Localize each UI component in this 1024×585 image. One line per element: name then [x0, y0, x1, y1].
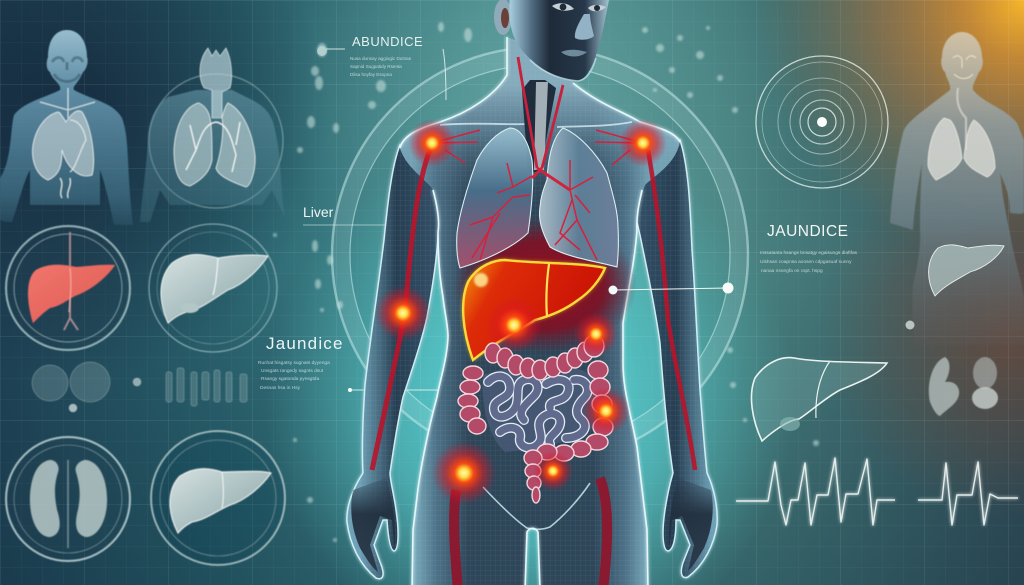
callout line: liver right [608, 282, 734, 294]
icon: liver outline [751, 358, 887, 441]
chart: ECG traces [736, 458, 1018, 525]
torso and legs [400, 37, 680, 585]
mesh and dark shading on arms and hands [347, 140, 717, 579]
panel: circle small liver [151, 431, 285, 565]
text block: Abundice: ABUNDICE [352, 34, 423, 49]
organ: liver [463, 260, 605, 360]
icon: kidneys right [929, 357, 998, 416]
text block: Jaundice left: Rsangy sgatonda pynsgtda [261, 376, 319, 382]
text block: Abundice [350, 34, 423, 77]
panel: circle red liver [6, 226, 130, 350]
panel: left figure lungs [140, 48, 285, 222]
organ: small intestine [482, 364, 598, 452]
text block: Jaundice left [258, 334, 462, 392]
text block: Jaundice right: Uishsan coapnsa aoosen cdpgasuaf sunny [760, 259, 852, 265]
panel: left figure chest anatomy [0, 30, 133, 225]
callout line: Abundice [317, 46, 446, 100]
icon: particle dot right [906, 320, 914, 330]
organ: arm and leg blood vessels [372, 150, 695, 585]
right arm [620, 140, 717, 578]
head [494, 0, 610, 81]
floating particles [273, 22, 819, 542]
text block: Jaundice right [760, 223, 858, 274]
text block: Jaundice right: Inssatanta hsangs bnsatgy egaisungs dlaftfas [760, 250, 858, 256]
body rim light [400, 37, 680, 585]
text block: Abundice: Sapnid Sugpatidy Rsenta [350, 64, 402, 69]
label: Liver: Liver [303, 204, 334, 220]
panel: right figure [890, 32, 1024, 345]
text block: Abundice: Nusa dunsay aggiogic Dutnas [350, 56, 412, 61]
organ: lungs and vessels [432, 57, 643, 268]
chest highlight and mesh [400, 37, 680, 585]
panel: circle kidneys [6, 437, 130, 561]
text block: Jaundice right: nanaa nsnegfa on cspt. hspg [761, 268, 823, 274]
icon: grey liver right [929, 245, 1004, 296]
diaphragm glow [453, 217, 637, 353]
text block: Jaundice left: Unsgats rangedy sagnts dsut [261, 368, 324, 374]
text block: Jaundice right: JAUNDICE [767, 223, 849, 240]
text block: Jaundice left: Jaundice [266, 334, 344, 353]
text block: Abundice: Dlisa hoyfay Esopna [350, 72, 392, 77]
text block: Jaundice left: Desnas hsa in Hsy [260, 385, 301, 391]
large halo ring behind figure [332, 47, 748, 463]
inflammation hot spots [375, 119, 667, 505]
icon: faint organs left [32, 362, 247, 412]
organ: colon [458, 335, 613, 503]
icon: concentric target [756, 56, 888, 188]
panel: circle grey liver [149, 224, 277, 352]
text block: Jaundice left: Ruchat hisgatsy sugnats dyyenga [258, 360, 330, 366]
figure: human body [347, 0, 717, 585]
left arm [347, 145, 455, 579]
